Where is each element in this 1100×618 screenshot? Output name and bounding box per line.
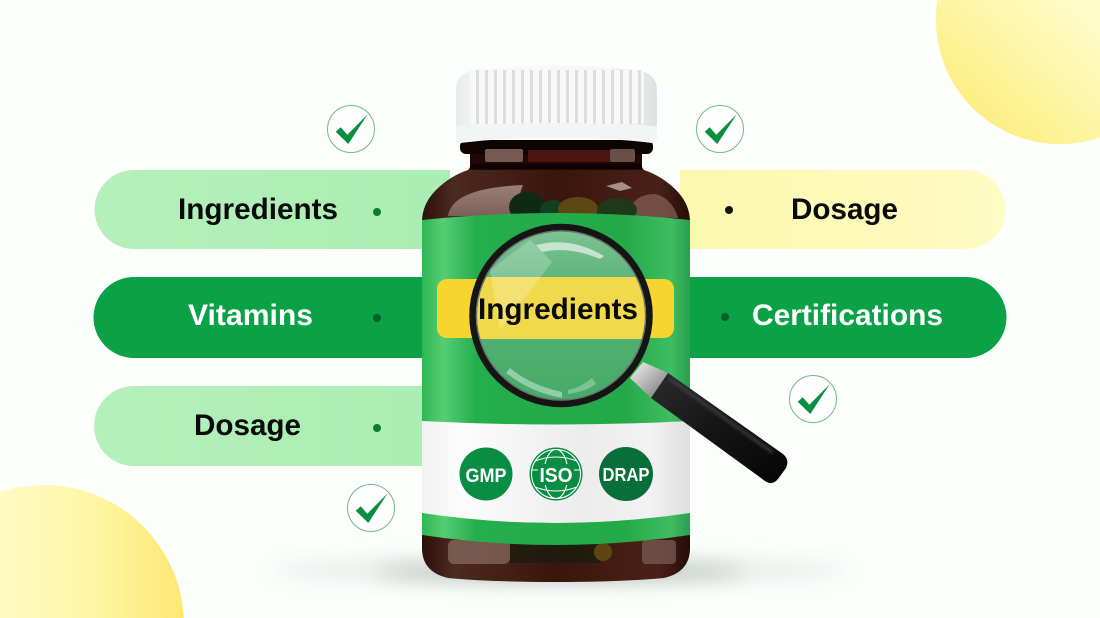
right pill: Certifications — [680, 277, 1006, 358]
right pill: Dosage — [680, 170, 1006, 249]
badge: ISO globe — [530, 448, 582, 500]
badge: DRAP — [599, 447, 653, 501]
glass highlights and pills — [448, 140, 678, 564]
magnified label text: Ingredients — [478, 293, 638, 326]
icon: check lower right — [790, 376, 836, 422]
left pill: Vitamins — [94, 277, 430, 358]
left pill: Ingredients: Ingredients — [178, 193, 338, 226]
icon: check top left — [328, 106, 374, 152]
supplement bottle — [422, 66, 690, 582]
left pill: Dosage: Dosage — [194, 409, 301, 442]
magnifying glass — [470, 227, 787, 483]
green label upper — [422, 213, 690, 425]
right pill: Dosage: Dosage — [791, 193, 898, 226]
badge: ISO globe: ISO — [540, 465, 572, 487]
white bottle cap — [456, 66, 657, 143]
yellow label tag — [437, 279, 674, 338]
right pill: Certifications: Certifications — [752, 299, 943, 332]
left pill: Dosage — [94, 386, 430, 466]
magnifier lens — [470, 227, 660, 404]
magnifier handle — [630, 362, 787, 483]
decorative yellow circle bottom left — [0, 485, 184, 618]
badge: GMP: GMP — [466, 466, 507, 487]
icon: check lower left — [348, 484, 394, 532]
white label panel — [422, 421, 690, 523]
badge: GMP — [460, 448, 512, 500]
decorative yellow circle top right — [936, 0, 1100, 144]
green label band — [422, 513, 690, 545]
bottle glass body — [422, 146, 690, 582]
left pill: Ingredients — [94, 170, 450, 249]
icon: check top right — [696, 106, 744, 152]
badge: DRAP: DRAP — [602, 465, 650, 485]
left pill: Vitamins: Vitamins — [188, 299, 313, 332]
bottle shadow — [270, 559, 850, 581]
